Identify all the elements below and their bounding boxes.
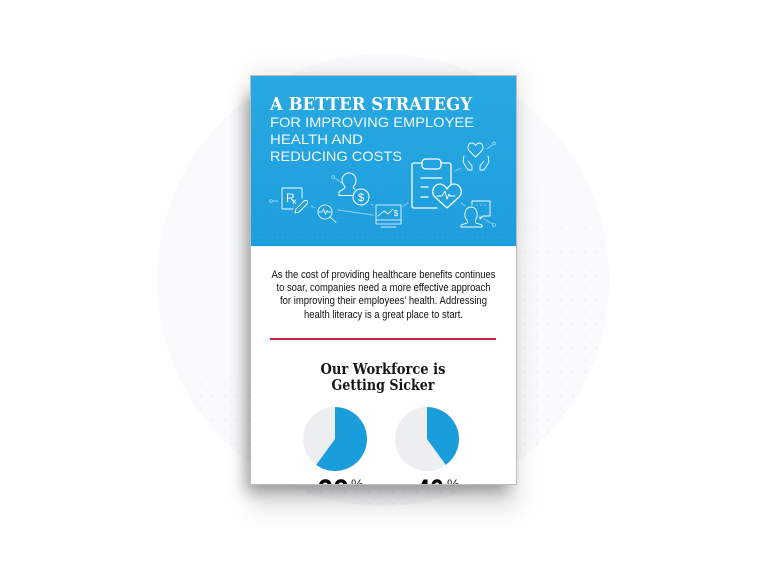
- title: A BETTER STRATEGY: [269, 94, 473, 115]
- icon: network connector lines: [270, 142, 495, 226]
- clipped percentage labels: %: [351, 476, 363, 492]
- icon: magnifier with pulse: [318, 205, 336, 222]
- icon: prescription pad: x: [292, 197, 296, 206]
- infographic canvas: [190, 60, 609, 514]
- section heading: Our Workforce is: [320, 361, 446, 378]
- subtitle: FOR IMPROVING EMPLOYEE: [270, 114, 474, 130]
- icon: hands holding heart: [463, 143, 489, 170]
- background dot pattern: [200, 263, 609, 505]
- intro text: health literacy is a great place to start.: [304, 309, 463, 321]
- icon: monitor with chart: [376, 205, 401, 227]
- subtitle: HEALTH AND: [270, 131, 363, 147]
- pie chart: 60 percent: [303, 407, 367, 471]
- section heading: Getting Sicker: [332, 377, 435, 394]
- section heading: [320, 361, 446, 394]
- subtitle: [270, 114, 474, 164]
- intro text: [272, 269, 496, 321]
- clipped percentage labels: 60: [317, 474, 349, 507]
- report card: [250, 76, 516, 507]
- pie chart: 40 percent: [395, 407, 459, 471]
- icon: prescription pad: [282, 188, 308, 213]
- icon: person with dollar coin: [339, 173, 369, 205]
- panel: blue header: [251, 76, 516, 246]
- red divider: [270, 338, 496, 340]
- subtitle: REDUCING COSTS: [270, 148, 402, 164]
- icon: person with dollar coin: $: [358, 192, 364, 204]
- icon: person with speech bubble: [461, 201, 490, 227]
- clipped percentage labels: %: [447, 476, 459, 492]
- clipped percentage labels: [319, 479, 458, 484]
- intro text: to soar, companies need a more effective approach: [276, 282, 490, 294]
- intro text: As the cost of providing healthcare benefits continues: [272, 269, 496, 281]
- icon: clipboard with heart: [412, 159, 461, 208]
- icon: monitor with chart: $: [394, 209, 399, 218]
- card shadow: [246, 72, 520, 510]
- intro text: for improving their employees’ health. Addressing: [280, 295, 487, 307]
- clipped percentage labels: 40: [416, 474, 444, 507]
- icon: prescription pad: R: [286, 191, 295, 205]
- background circle: [157, 54, 609, 506]
